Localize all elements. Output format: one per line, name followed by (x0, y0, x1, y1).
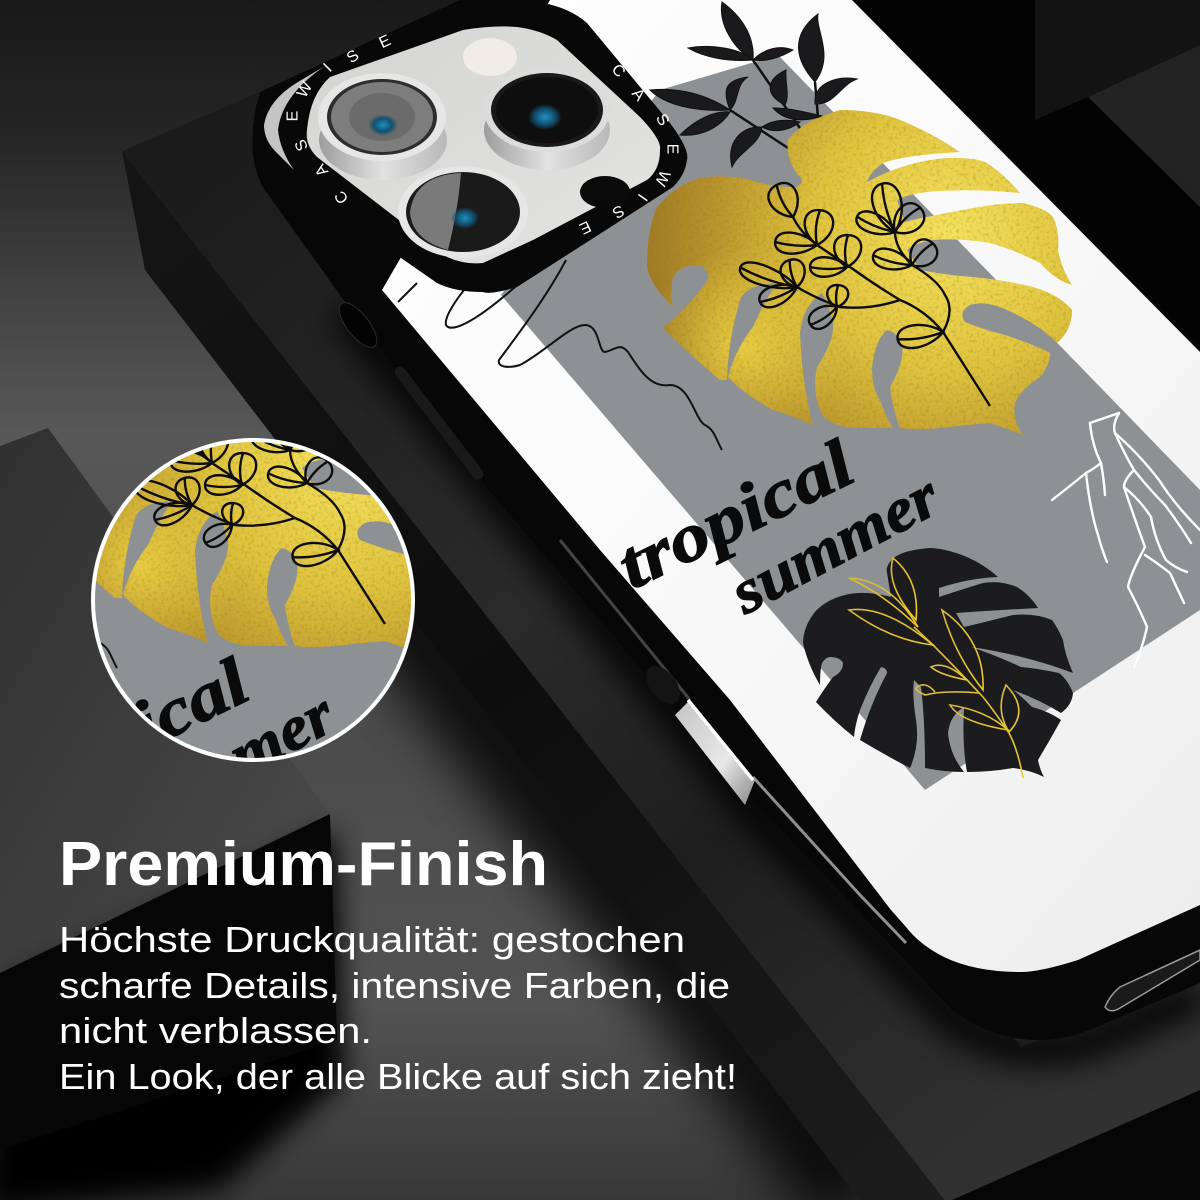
text: CASEWISE ring lettering: W (651, 168, 673, 189)
text: CASEWISE ring lettering: W (294, 78, 317, 101)
icon: gold outline sprig on black leaf (849, 558, 1023, 778)
text: CASEWISE ring lettering: E (284, 111, 302, 121)
body text: nicht verblassen. (59, 1010, 372, 1051)
text: CASEWISE ring lettering: I (320, 60, 336, 76)
text: tropical summer lettering: tropical (605, 425, 865, 603)
icon: black branch top (650, 2, 857, 167)
body text: Höchste Druckqualität: gestochen (59, 919, 685, 960)
text: CASEWISE ring lettering: E (377, 32, 393, 52)
camera bezel (253, 0, 687, 293)
phone shadow (345, 310, 1200, 1049)
icon: gold monstera leaf (647, 110, 1072, 435)
text: CASEWISE ring lettering: C (332, 187, 352, 207)
icon: line-art sprig over gold leaf (737, 178, 990, 406)
text: CASEWISE ring lettering: I (634, 190, 650, 204)
side buttons and port (333, 297, 1200, 1011)
shadow beside block edge (300, 480, 860, 1200)
lens bottom (398, 166, 528, 258)
text: CASEWISE ring lettering: S (344, 47, 362, 67)
body text: scharfe Details, intensive Farben, die (59, 965, 730, 1006)
back area top right (852, 0, 1200, 360)
text: CASEWISE ring lettering: A (312, 160, 332, 179)
gray crescent reflection (264, 66, 325, 170)
text: tropical summer lettering (605, 425, 951, 628)
text: CASEWISE ring lettering: A (628, 85, 648, 105)
text: tropical summer lettering: summer (719, 461, 951, 628)
text: CASEWISE ring lettering: S (609, 201, 627, 221)
step block shadow (0, 830, 345, 1200)
heading: Premium-Finish (59, 830, 548, 899)
text: CASEWISE ring lettering: S (292, 137, 312, 153)
body text: Ein Look, der alle Blicke auf sich zieht! (59, 1056, 737, 1097)
corner wedge bottom right (952, 1090, 1200, 1200)
step block front (0, 814, 337, 1150)
printed artwork (398, 2, 1200, 790)
text: CASEWISE ring lettering: C (608, 61, 628, 81)
phone body (252, 0, 1200, 1040)
step block face (0, 428, 330, 973)
wavy black line (398, 260, 722, 450)
text: CASEWISE ring lettering (284, 32, 680, 237)
phone back: white print area (382, 0, 1200, 972)
text: CASEWISE ring lettering: E (577, 217, 593, 237)
text: CASEWISE ring lettering: E (664, 144, 680, 154)
magnifier circle (91, 438, 415, 762)
body text (59, 919, 737, 1097)
gray rectangle (501, 55, 1200, 790)
flash (463, 38, 517, 76)
block front edge (122, 151, 945, 1200)
microphone hole (580, 176, 630, 208)
camera glass window (307, 26, 660, 263)
lens left (318, 73, 447, 180)
camera bump (253, 0, 687, 293)
icon: white root lines (1052, 413, 1200, 667)
text: CASEWISE ring lettering: S (652, 111, 672, 129)
lens right (484, 68, 610, 170)
icon: black monstera leaf (803, 548, 1073, 777)
